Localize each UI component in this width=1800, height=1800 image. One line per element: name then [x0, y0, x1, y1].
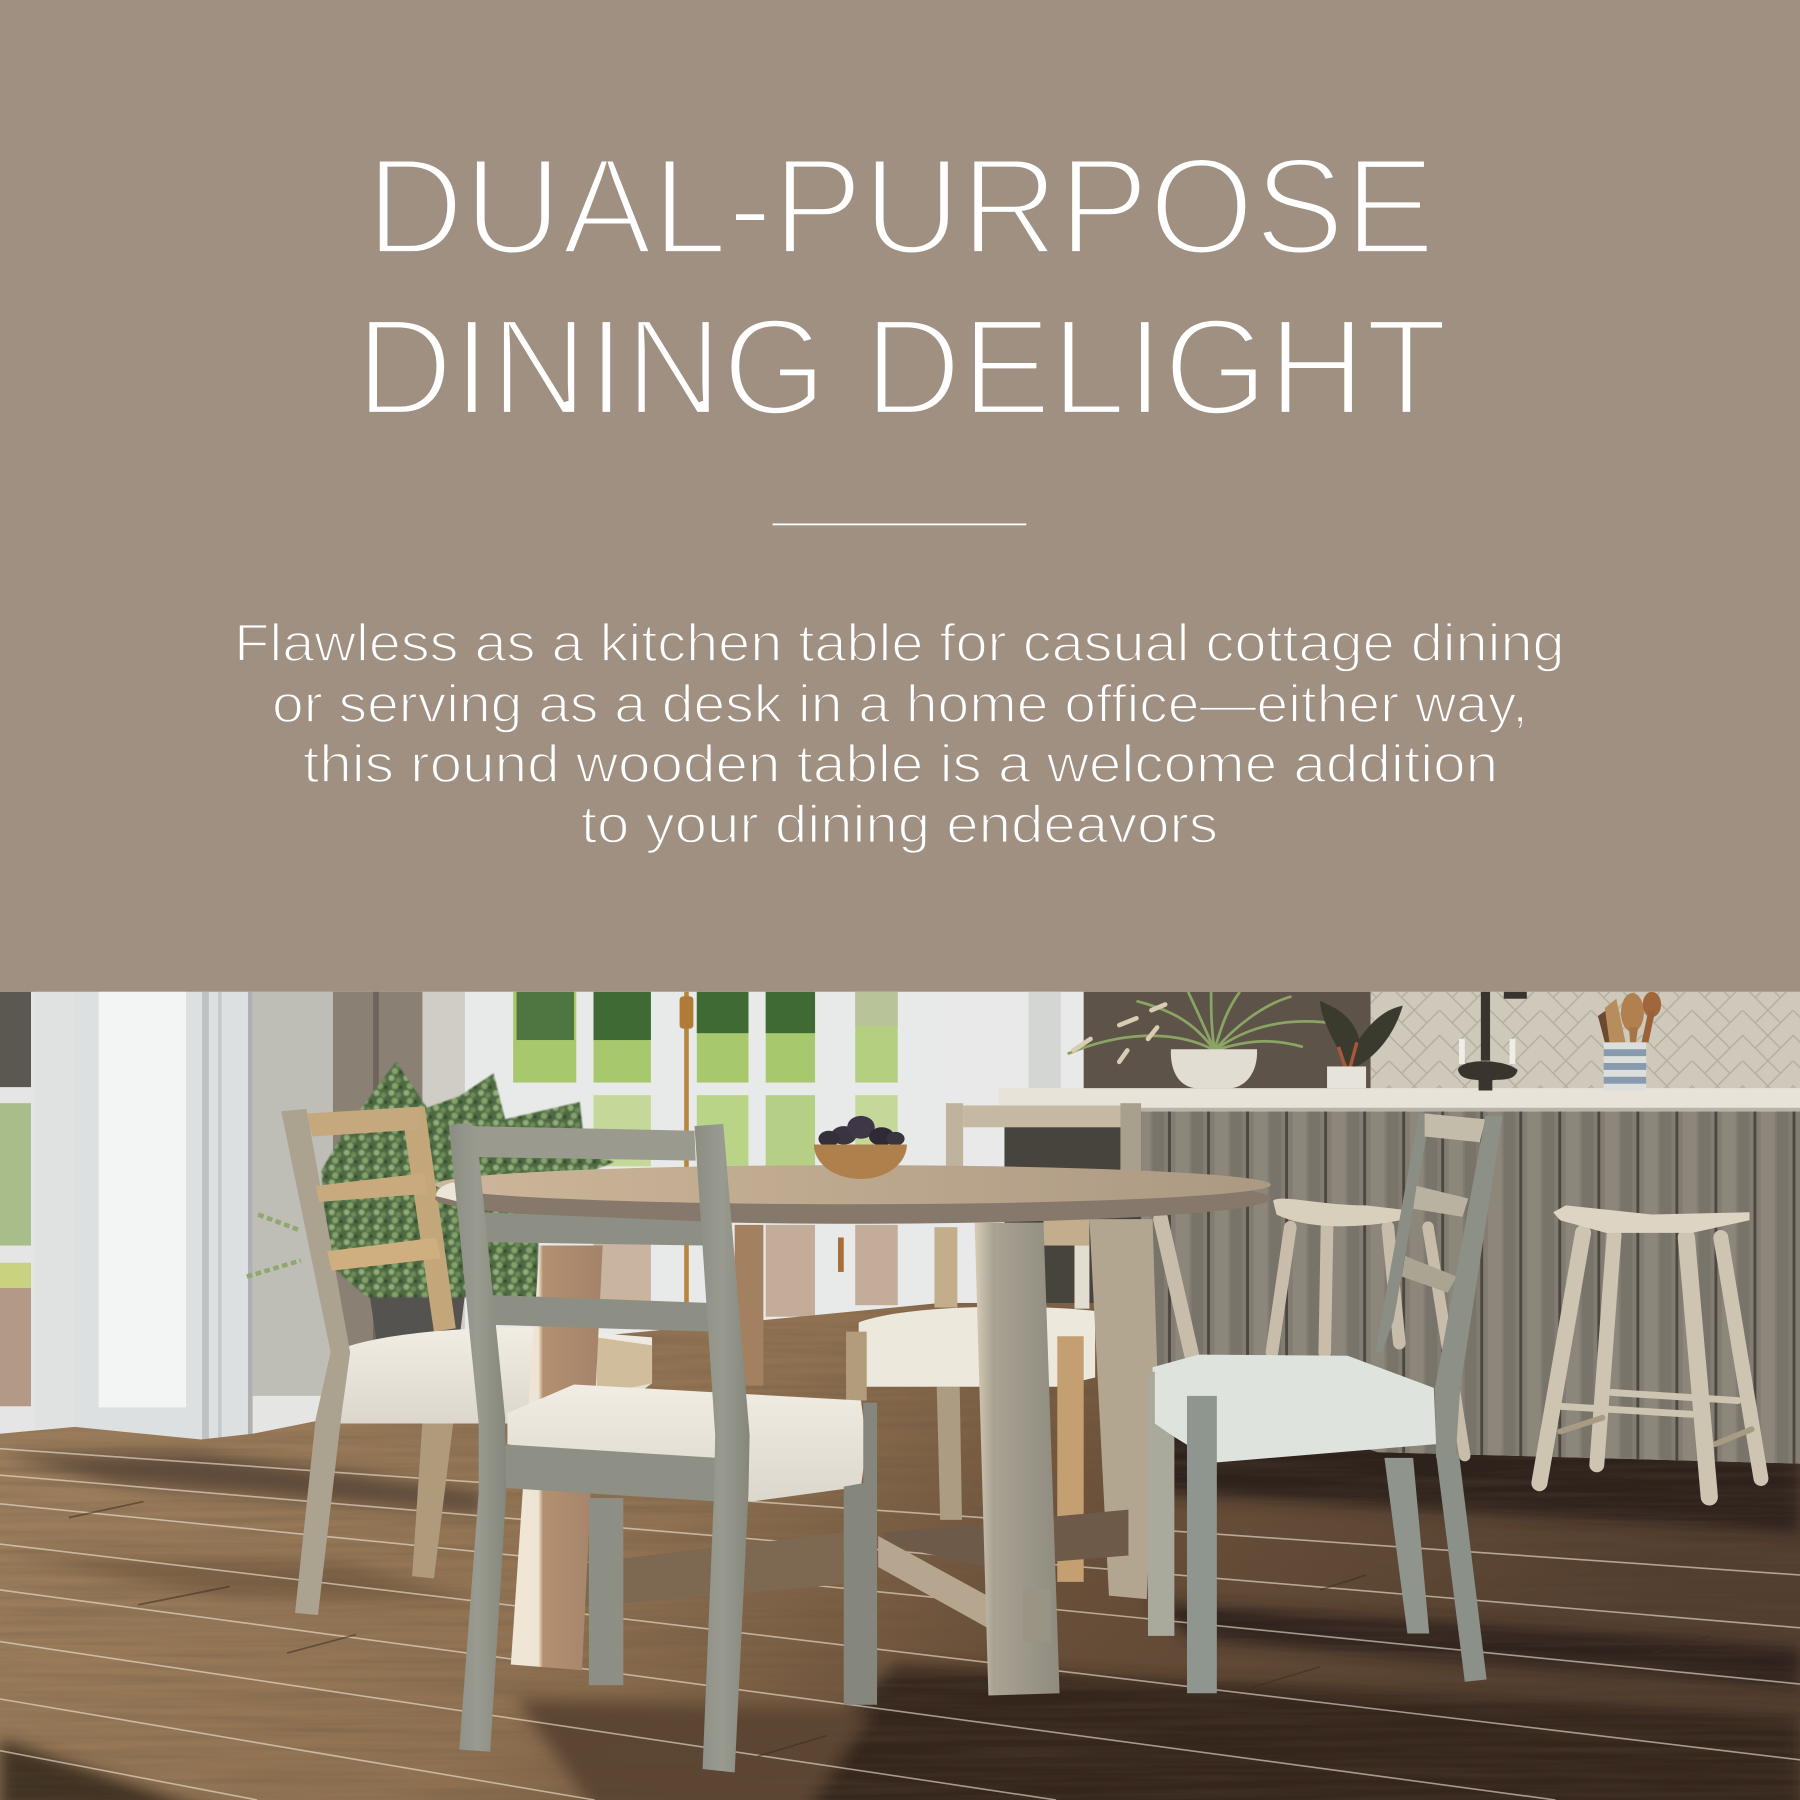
left tan dining chair [281, 1107, 652, 1615]
small potted plant [1320, 1001, 1403, 1088]
kitchen backsplash and shelf wall [941, 992, 1800, 1309]
kitchen island [999, 1088, 1800, 1464]
table stretcher: right [884, 1510, 1128, 1567]
title: DINING DELIGHT [356, 290, 1448, 444]
far dining chair behind table [846, 1103, 1141, 1582]
leafy plant in planter [247, 1062, 614, 1341]
title: DUAL-PURPOSE [366, 130, 1435, 284]
chair apron [499, 1444, 717, 1502]
wooden fruit bowl [814, 1116, 907, 1179]
body text [234, 614, 1565, 855]
room back wall and doors [0, 992, 1800, 1474]
table top surface [435, 1165, 1271, 1204]
chair top rail [473, 1126, 696, 1161]
right chair rear-left leg [1148, 1372, 1174, 1636]
right grey dining chair [1148, 1114, 1503, 1693]
table leg: front left [511, 1246, 603, 1670]
table leg: front right [975, 1223, 1060, 1696]
chair middle rail [480, 1212, 704, 1246]
body text: this round wooden table is a welcome addition [303, 735, 1498, 794]
chair seat cushion [507, 1384, 867, 1502]
right chair rear legs [1384, 1458, 1429, 1634]
stool: rear [1161, 1199, 1465, 1456]
faucet [1458, 992, 1527, 1091]
photo: dining room scene [0, 992, 1800, 1800]
chair left post [449, 1123, 506, 1752]
body text: to your dining endeavors [581, 796, 1218, 855]
table leg: back left [735, 1225, 763, 1386]
table stretcher: left [580, 1533, 844, 1607]
divider rule [773, 523, 1026, 525]
body text: Flawless as a kitchen table for casual cottage dining [234, 614, 1565, 673]
floor [0, 1297, 1800, 1800]
right chair front leg [1187, 1396, 1217, 1693]
right chair back frame [1375, 1114, 1503, 1458]
table top edge [435, 1173, 1271, 1224]
chair inner rear leg [589, 1498, 623, 1685]
right chair seat [1153, 1355, 1436, 1462]
chair front leg [844, 1403, 877, 1705]
panel: taupe text background [0, 0, 1800, 992]
chair lower rail [487, 1295, 709, 1332]
potted grass on counter [1068, 992, 1337, 1088]
utensil jar [1598, 992, 1661, 1091]
dining table [435, 1165, 1271, 1696]
table brace: diagonal [878, 1536, 987, 1628]
table leg: back right [1089, 1219, 1157, 1599]
front grey dining chair [449, 1123, 877, 1772]
chair right post [695, 1124, 750, 1772]
body text: or serving as a desk in a home office—either way, [272, 675, 1528, 734]
stool: right [1539, 1205, 1761, 1497]
right chair rear outer leg [1436, 1454, 1487, 1682]
title [356, 130, 1448, 444]
